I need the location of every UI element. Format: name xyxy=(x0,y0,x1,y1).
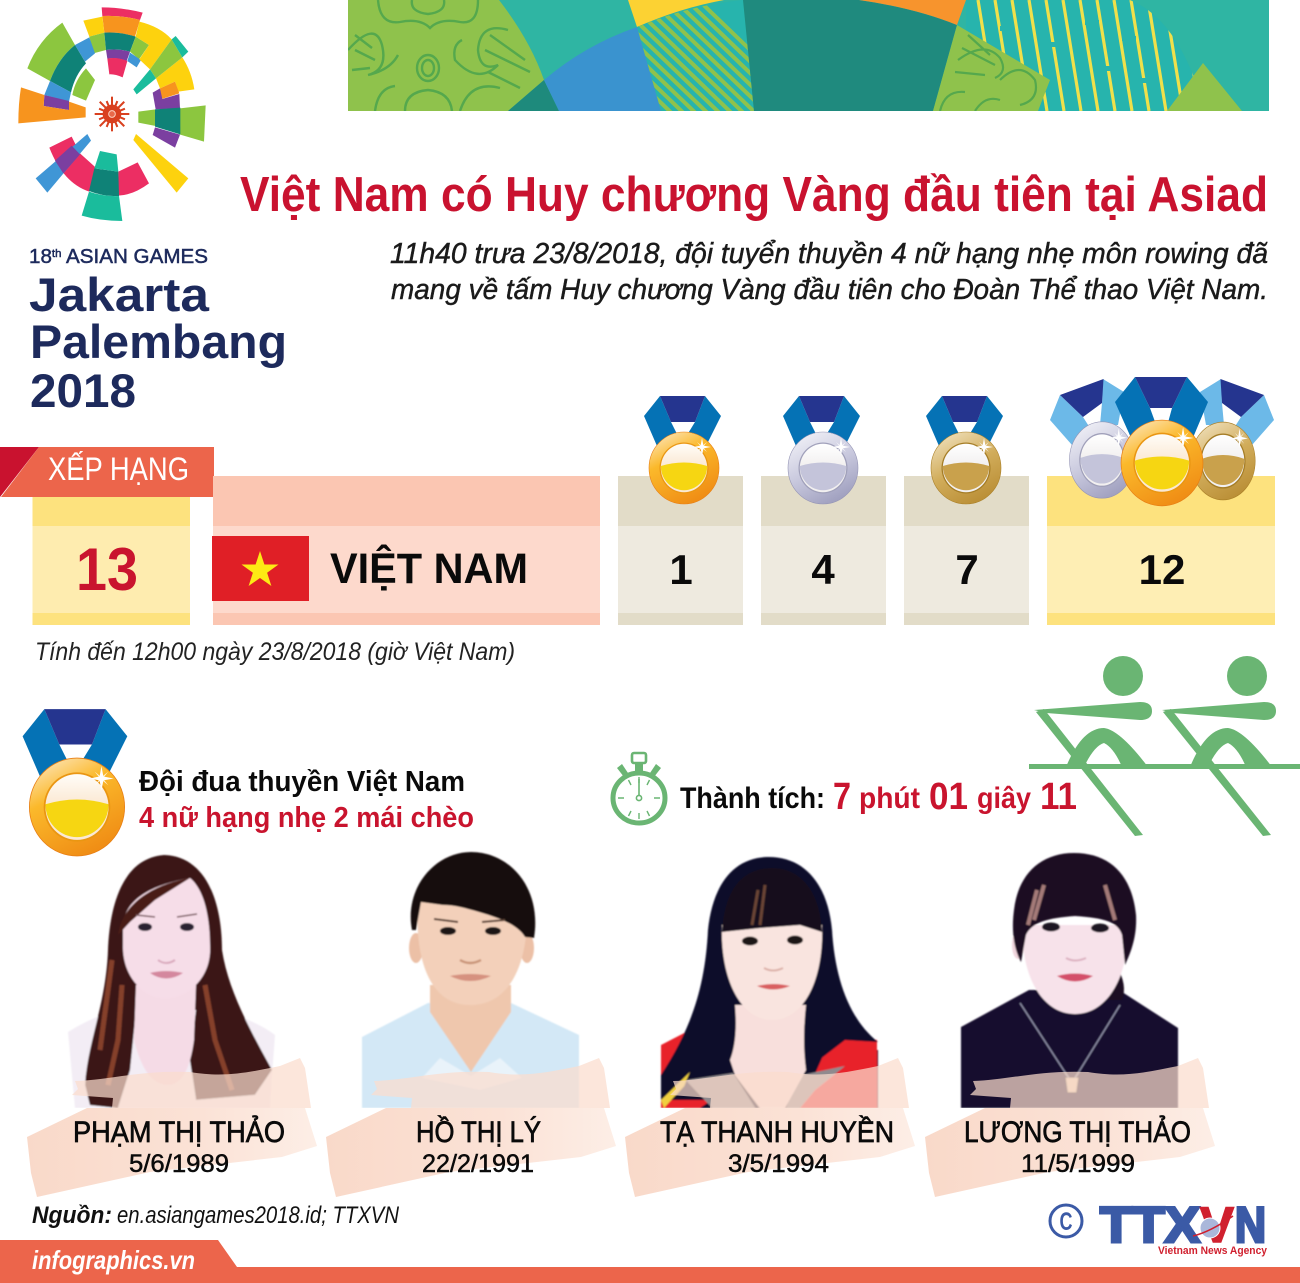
yellow striped dome xyxy=(966,0,1194,111)
gold count cell xyxy=(618,476,743,625)
result time: Thành tích: xyxy=(680,782,825,815)
logo: Asian Games emblem xyxy=(18,7,206,221)
athlete 3: 3/5/1994 xyxy=(728,1150,829,1178)
copyright logo TTXVN xyxy=(1050,1197,1268,1257)
green batik motif right xyxy=(933,25,1050,111)
brush label: Phạm Thị Thảo xyxy=(27,1058,317,1197)
logo wordmark: 2018 xyxy=(30,364,136,417)
copyright logo TTXVN: TTX xyxy=(1100,1197,1200,1253)
portrait: Lương Thị Thảo xyxy=(961,853,1178,1108)
portrait: Hồ Thị Lý xyxy=(362,852,579,1108)
footer bar: infographics.vn xyxy=(32,1245,195,1275)
green batik motif left xyxy=(348,0,544,111)
logo wordmark: ASIAN GAMES xyxy=(61,246,208,268)
copyright logo TTXVN: V xyxy=(1200,1197,1235,1253)
footer bar xyxy=(0,1240,1300,1283)
icon: rowers xyxy=(1029,656,1300,836)
dark teal sector xyxy=(743,0,957,111)
athlete 4: 11/5/1999 xyxy=(1021,1150,1135,1178)
orange sector xyxy=(859,0,966,25)
team heading: Đội đua thuyền Việt Nam xyxy=(139,766,465,798)
icon: gold medal xyxy=(644,396,721,504)
country cell xyxy=(212,476,600,625)
athlete 3 xyxy=(660,1115,894,1178)
athlete 2 xyxy=(416,1115,541,1178)
result time: 7 xyxy=(833,776,851,818)
icon: stopwatch xyxy=(613,753,665,823)
team heading xyxy=(139,766,474,834)
hatched sector xyxy=(637,0,754,111)
icon: medal trio xyxy=(1050,377,1274,506)
icon: silver medal xyxy=(783,396,860,504)
silver count cell xyxy=(761,476,886,625)
subtitle: mang về tấm Huy chương Vàng đầu tiên cho Đoàn Thể thao Việt Nam. xyxy=(391,274,1268,306)
brush label: Lương Thị Thảo xyxy=(925,1058,1215,1197)
brush label: Hồ Thị Lý xyxy=(326,1058,616,1197)
copyright logo TTXVN: N xyxy=(1235,1197,1266,1253)
athlete 1: 5/6/1989 xyxy=(129,1150,229,1178)
yellow sector xyxy=(628,0,724,27)
icon: Vietnam flag xyxy=(212,536,309,601)
athlete names and birth dates xyxy=(73,1115,1191,1178)
blue sector xyxy=(544,27,661,111)
copyright logo TTXVN: Vietnam News Agency xyxy=(1158,1245,1268,1257)
portrait: Tạ Thanh Huyền xyxy=(661,857,878,1108)
source note: Nguồn: xyxy=(32,1202,112,1229)
banner: top pattern xyxy=(348,0,1269,111)
logo wordmark: th xyxy=(52,248,61,260)
bronze count cell: 7 xyxy=(955,546,979,593)
athlete 3: TẠ THANH HUYỀN xyxy=(660,1115,894,1149)
ribbon: rank label: XẾP HẠNG xyxy=(48,451,189,487)
silver count cell: 4 xyxy=(811,546,835,593)
source note: en.asiangames2018.id; TTXVN xyxy=(117,1202,400,1229)
total count cell: 12 xyxy=(1139,546,1185,593)
ribbon: rank label xyxy=(0,447,214,497)
logo wordmark: 18 xyxy=(29,246,51,268)
portrait: Phạm Thị Thảo xyxy=(68,855,275,1108)
athlete 1 xyxy=(73,1115,285,1178)
athlete 4 xyxy=(964,1115,1191,1178)
logo wordmark: Jakarta xyxy=(29,268,210,321)
icon: bronze medal xyxy=(926,396,1003,504)
gold count cell: 1 xyxy=(669,546,693,593)
athlete 2: 22/2/1991 xyxy=(422,1150,534,1178)
result time: 01 xyxy=(929,776,968,818)
rank cell: 13 xyxy=(76,536,138,603)
brush label: Tạ Thanh Huyền xyxy=(625,1058,915,1197)
logo wordmark: Palembang xyxy=(30,315,287,368)
bronze count cell xyxy=(904,476,1029,625)
athlete 1: PHẠM THỊ THẢO xyxy=(73,1115,285,1149)
result time: giây xyxy=(977,782,1031,815)
athlete 4: LƯƠNG THỊ THẢO xyxy=(964,1115,1191,1149)
result time: phút xyxy=(859,782,920,815)
icon: large gold medal xyxy=(23,709,127,856)
result time: 11 xyxy=(1040,776,1077,818)
dark teal wedge xyxy=(508,80,559,111)
total count cell xyxy=(1047,476,1275,625)
country cell: VIỆT NAM xyxy=(330,544,528,593)
light green triangle xyxy=(1167,63,1242,111)
note: data cut-off: Tính đến 12h00 ngày 23/8/2018 (giờ Việt Nam) xyxy=(35,638,515,666)
copyright logo TTXVN: C xyxy=(1060,1208,1072,1236)
source note xyxy=(32,1202,400,1229)
logo wordmark xyxy=(29,246,287,417)
subtitle: 11h40 trưa 23/8/2018, đội tuyển thuyền 4 nữ hạng nhẹ môn rowing đã xyxy=(390,238,1268,270)
rank cell xyxy=(32,497,190,625)
team heading: 4 nữ hạng nhẹ 2 mái chèo xyxy=(139,802,474,834)
result time xyxy=(680,776,1077,818)
athlete 2: HỒ THỊ LÝ xyxy=(416,1115,541,1149)
subtitle xyxy=(390,238,1268,306)
